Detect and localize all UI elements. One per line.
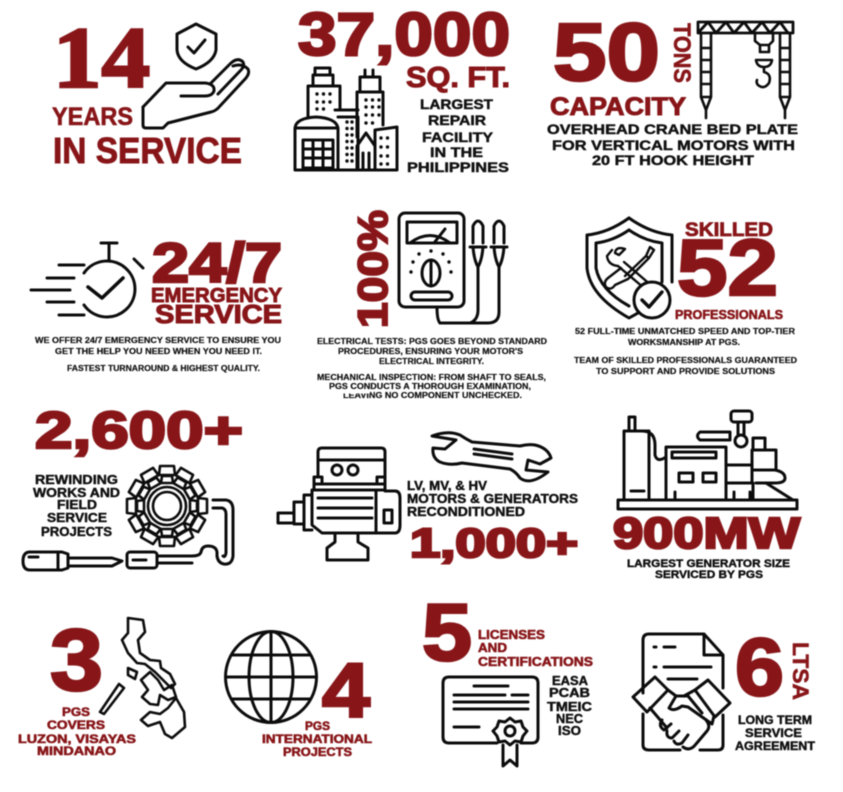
- panel: 6 LTSA: [633, 622, 816, 753]
- text block: tests description: MECHANICAL INSPECTION: FROM SHAFT TO SEALS,: [317, 373, 546, 382]
- caption: crane bed plate: FOR VERTICAL MOTORS WITH: [552, 137, 795, 153]
- number: 2,600+: 2,600+: [35, 402, 243, 460]
- text block: accreditation list: ISO: [558, 723, 581, 738]
- text block: international projects: INTERNATIONAL: [262, 732, 372, 746]
- text block: coverage: [18, 705, 136, 758]
- text block: emergency description: [35, 336, 281, 373]
- caption: largest repair facility: REPAIR: [428, 112, 486, 128]
- panel: 1,000+ motors: [278, 433, 578, 566]
- label: tons: TONS: [668, 23, 695, 83]
- text block: skilled description: TO SUPPORT AND PROVIDE SOLUTIONS: [596, 367, 776, 376]
- label: LTSA: LTSA: [788, 642, 813, 700]
- number: 24/7: 24/7: [152, 231, 282, 294]
- label: in service: IN SERVICE: [53, 130, 242, 171]
- icon: wrench: [432, 433, 551, 481]
- number: 5: 5: [422, 588, 472, 678]
- label: capacity: CAPACITY: [550, 93, 686, 121]
- text block: motors and generators: MOTORS & GENERATORS: [407, 491, 578, 506]
- text block: tests description: ELECTRICAL INTEGRITY.: [379, 357, 484, 366]
- number: 50: 50: [553, 7, 660, 98]
- panel: 5 licenses: [422, 588, 593, 766]
- icon: certificate: [443, 677, 538, 766]
- panel: 100% tests: [317, 210, 547, 400]
- caption: largest repair facility: FACILITY: [422, 129, 494, 145]
- text block: skilled description: TEAM OF SKILLED PROFESSIONALS GUARANTEED: [574, 356, 797, 365]
- number: 3: 3: [50, 612, 103, 709]
- icon: motor: [278, 448, 400, 560]
- panel: 14 years in service: [52, 9, 249, 171]
- icon: shield with tools: [587, 218, 672, 318]
- text block: accreditation list: EASA: [552, 673, 589, 688]
- text block: generator size: LARGEST GENERATOR SIZE: [627, 558, 790, 570]
- text block: tests description: ELECTRICAL TESTS: PGS GOES BEYOND STANDARD: [317, 337, 547, 346]
- icon: generator: [618, 411, 797, 509]
- text block: tests description: PROCEDURES, ENSURING YOUR MOTOR'S: [338, 347, 524, 356]
- text block: international projects: PROJECTS: [283, 745, 352, 759]
- text block: accreditation list: PCAB: [549, 685, 590, 700]
- icon: stator with screwdriver and cable: [23, 466, 233, 570]
- text block: rewinding works: WORKS AND: [33, 485, 120, 500]
- text block: emergency description: GET THE HELP YOU NEED WHEN YOU NEED IT.: [55, 347, 262, 356]
- text block: long term service agreement: AGREEMENT: [735, 739, 816, 753]
- label: professionals: PROFESSIONALS: [675, 307, 783, 322]
- icon: stopwatch: [31, 243, 143, 317]
- caption: largest repair facility: LARGEST: [420, 96, 493, 112]
- icon: Philippines map: [100, 618, 185, 738]
- text block: coverage: MINDANAO: [37, 744, 116, 758]
- text block: coverage: LUZON, VISAYAS: [18, 732, 136, 746]
- text block: rewinding works: [33, 472, 120, 539]
- text block: skilled description: 52 FULL-TIME UNMATCHED SPEED AND TOP-TIER: [575, 327, 795, 336]
- text block: rewinding works: FIELD: [57, 497, 97, 512]
- text block: coverage: PGS: [62, 705, 90, 719]
- text block: licenses and certifications: LICENSES: [478, 627, 545, 642]
- panel: 24/7 emergency service: [31, 231, 283, 373]
- number: 37,000: 37,000: [298, 1, 510, 68]
- icon: city buildings: [295, 68, 397, 170]
- number: 1,000+: 1,000+: [410, 520, 578, 566]
- icon: hand with shield: [143, 24, 249, 128]
- caption: largest repair facility: [407, 96, 509, 175]
- text block: emergency description: WE OFFER 24/7 EMERGENCY SERVICE TO ENSURE YOU: [35, 336, 281, 345]
- icon: contract and handshake: [633, 634, 730, 750]
- text block: emergency description: FASTEST TURNAROUND & HIGHEST QUALITY.: [67, 364, 260, 373]
- text block: tests description: [317, 337, 547, 400]
- panel: 3 regions: [18, 612, 185, 758]
- caption: crane bed plate: 20 FT HOOK HEIGHT: [592, 152, 755, 168]
- text block: accreditation list: NEC: [556, 711, 584, 726]
- text block: motors and generators: LV, MV, & HV: [407, 478, 487, 493]
- text block: skilled description: [574, 327, 797, 376]
- caption: crane bed plate: [547, 121, 798, 168]
- text block: accreditation list: [547, 673, 593, 738]
- panel: 2,600+ rewinding: [23, 402, 243, 570]
- text block: generator size: [627, 558, 790, 581]
- text block: tests description: LEAVING NO COMPONENT UNCHECKED.: [343, 391, 522, 400]
- number: 6: 6: [735, 622, 784, 713]
- text block: licenses and certifications: AND: [478, 640, 507, 655]
- text block: rewinding works: SERVICE: [47, 510, 107, 525]
- caption: crane bed plate: OVERHEAD CRANE BED PLATE: [547, 121, 798, 137]
- number: 4: 4: [322, 648, 370, 734]
- number: 100%: 100%: [349, 210, 396, 328]
- text block: coverage: COVERS: [47, 718, 105, 732]
- number: 52: 52: [677, 223, 778, 312]
- label: emergency: EMERGENCY: [151, 285, 283, 307]
- caption: largest repair facility: IN THE: [430, 144, 483, 160]
- label: sq ft: SQ. FT.: [406, 62, 510, 94]
- panel: 37,000 sq ft: [295, 1, 510, 175]
- panel: 50 tons capacity: [547, 7, 798, 168]
- text block: long term service agreement: LONG TERM: [738, 713, 812, 727]
- text block: motors and generators: [407, 478, 578, 519]
- icon: globe: [226, 632, 316, 722]
- caption: largest repair facility: PHILIPPINES: [407, 159, 509, 175]
- text block: rewinding works: PROJECTS: [41, 524, 112, 539]
- panel: 900MW: [613, 411, 801, 581]
- label: years: YEARS: [52, 103, 133, 131]
- text block: international projects: [262, 719, 372, 759]
- panel: 52 skilled professionals: [574, 218, 797, 376]
- text block: licenses and certifications: [478, 627, 593, 669]
- text block: tests description: PGS CONDUCTS A THOROUGH EXAMINATION,: [329, 382, 531, 391]
- panel: 4 international projects: [226, 632, 372, 759]
- text block: skilled description: WORKSMANSHIP AT PGS.: [628, 338, 740, 347]
- label: service: SERVICE: [155, 299, 282, 329]
- text block: licenses and certifications: CERTIFICATIONS: [478, 654, 593, 669]
- number: 900MW: 900MW: [613, 509, 801, 558]
- text block: rewinding works: REWINDING: [35, 472, 118, 487]
- text block: generator size: SERVICED BY PGS: [655, 569, 763, 581]
- text block: long term service agreement: SERVICE: [745, 726, 802, 740]
- text block: long term service agreement: [735, 713, 816, 753]
- number: 14: 14: [53, 9, 150, 106]
- icon: overhead crane: [698, 22, 793, 118]
- icon: multimeter: [399, 213, 507, 323]
- label: skilled: SKILLED: [685, 220, 773, 241]
- text block: accreditation list: TMEIC: [547, 699, 593, 714]
- text block: motors and generators: RECONDITIONED: [407, 504, 525, 519]
- text block: international projects: PGS: [305, 719, 330, 733]
